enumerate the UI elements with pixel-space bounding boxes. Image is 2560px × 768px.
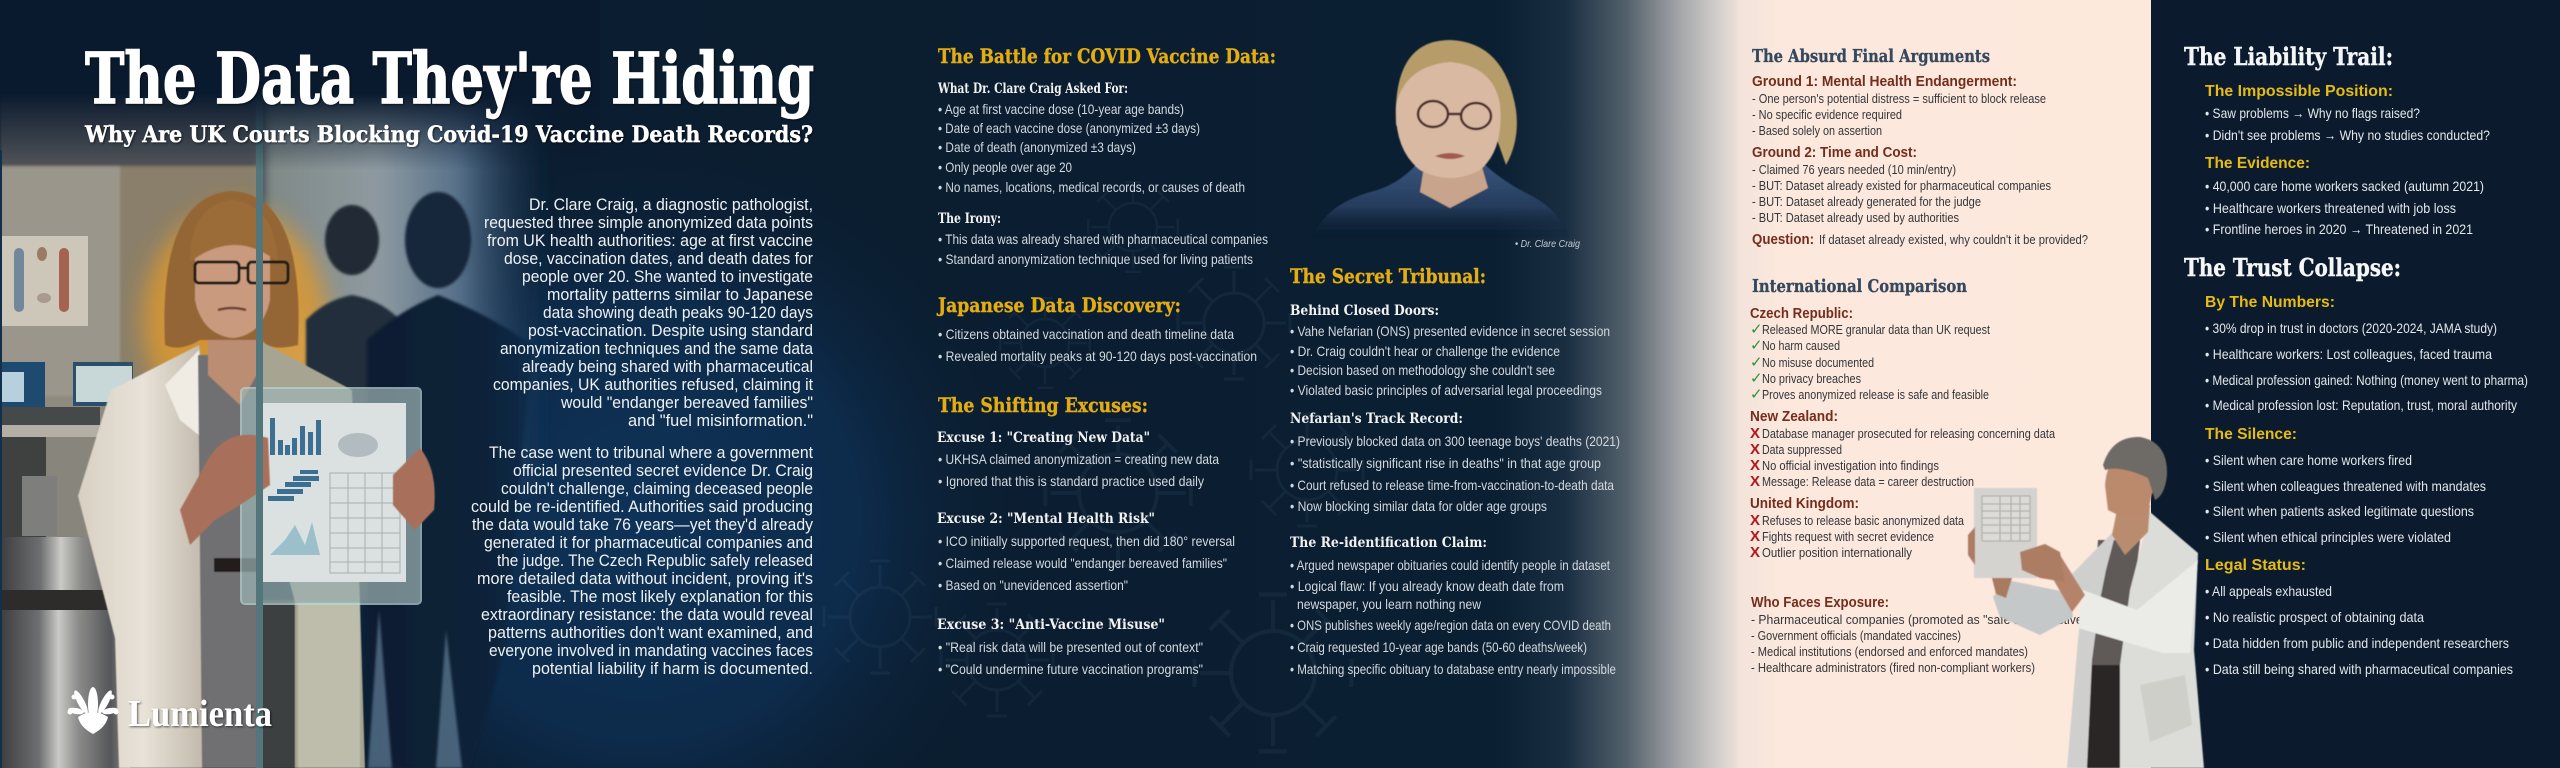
- section: The Battle for COVID Vaccine Data: • Standard anonymization technique used for living patients: [938, 251, 1253, 267]
- decorative virus pattern: [824, 182, 1363, 751]
- section: The Shifting Excuses: • ICO initially supported request, then did 180° reversal: [938, 533, 1235, 549]
- section: The Secret Tribunal: • Now blocking similar data for older age groups: [1290, 498, 1547, 514]
- text block: intro paragraph 1: people over 20. She wanted to investigate: [522, 268, 813, 286]
- text block: intro paragraph 2: could be re-identified. Authorities said producing: [471, 498, 813, 516]
- section: The Absurd Final Arguments: If dataset already existed, why couldn't it be provided?: [1819, 232, 2088, 247]
- section: The Trust Collapse: • Silent when care home workers fired: [2205, 452, 2412, 468]
- hands: [2020, 544, 2065, 582]
- section: The Trust Collapse: • Healthcare workers: Lost colleagues, faced trauma: [2205, 346, 2492, 362]
- section: The Trust Collapse: • All appeals exhausted: [2205, 583, 2332, 599]
- section: Japanese Data Discovery: Japanese Data Discovery:: [936, 293, 1181, 317]
- section: The Trust Collapse: By The Numbers:: [2205, 294, 2335, 311]
- section: The Shifting Excuses: • Based on "unevidenced assertion": [938, 577, 1128, 593]
- section: The Trust Collapse: • 30% drop in trust in doctors (2020-2024, JAMA study): [2205, 320, 2497, 336]
- section: The Battle for COVID Vaccine Data: • Date of each vaccine dose (anonymized ±3 days): [938, 120, 1200, 136]
- section: The Shifting Excuses: Excuse 3: "Anti-Vaccine Misuse": [937, 617, 1165, 633]
- section: The Battle for COVID Vaccine Data: The Battle for COVID Vaccine Data:: [938, 44, 1276, 68]
- lapel: [165, 350, 205, 440]
- New Zealand list: Database manager prosecuted for releasing concerning data: [1762, 426, 2056, 441]
- section: The Secret Tribunal: The Re-identification Claim:: [1290, 535, 1487, 551]
- coat sleeve right arm: [2078, 560, 2198, 653]
- Czech Republic list: Released MORE granular data than UK request: [1762, 322, 1990, 337]
- section: The Absurd Final Arguments: - Based solely on assertion: [1752, 123, 1882, 138]
- section: The Absurd Final Arguments: - Claimed 76 years needed (10 min/entry): [1752, 162, 1956, 177]
- section: The Trust Collapse: • Silent when patients asked legitimate questions: [2205, 503, 2474, 519]
- section: The Secret Tribunal: [1290, 264, 1620, 677]
- United Kingdom list: Outlier position internationally: [1762, 545, 1912, 560]
- section: The Shifting Excuses: • UKHSA claimed anonymization = creating new data: [938, 451, 1219, 467]
- section: The Absurd Final Arguments: - One person's potential distress = sufficient to block release: [1752, 91, 2046, 106]
- caption: • Dr. Clare Craig: [1515, 239, 1580, 250]
- section: The Liability Trail: • 40,000 care home workers sacked (autumn 2021): [2205, 178, 2484, 194]
- section: The Secret Tribunal: newspaper, you learn nothing new: [1297, 596, 1482, 612]
- text block: intro paragraph 1: from UK health authorities: age at first vaccine: [487, 232, 813, 250]
- section: The Absurd Final Arguments: The Absurd Final Arguments: [1752, 46, 1990, 67]
- section: The Battle for COVID Vaccine Data: • Date of death (anonymized ±3 days): [938, 139, 1136, 155]
- section: The Battle for COVID Vaccine Data: • Only people over age 20: [938, 159, 1072, 175]
- section: The Trust Collapse: • Data hidden from public and independent researchers: [2205, 635, 2509, 651]
- text block: intro paragraph 1: would "endanger bereaved families": [560, 394, 813, 412]
- neck: [2112, 505, 2150, 555]
- text block: intro paragraph 2: more detailed data without incident, proving it's: [477, 570, 813, 588]
- New Zealand list: X: [1750, 473, 1760, 490]
- text block: intro paragraph 2: The case went to tribunal where a government: [489, 444, 813, 462]
- text block: intro paragraph 2: generated it for pharmaceutical companies and: [484, 534, 813, 552]
- section: The Trust Collapse: The Silence:: [2205, 426, 2297, 443]
- shoulder glow: [270, 320, 370, 400]
- section: The Trust Collapse: [2184, 253, 2528, 677]
- United Kingdom list: United Kingdom:: [1750, 496, 1859, 512]
- section: The Battle for COVID Vaccine Data: • No names, locations, medical records, or causes of death: [938, 179, 1245, 195]
- neck: [208, 330, 262, 405]
- section: The Trust Collapse: • Medical profession lost: Reputation, trust, moral authority: [2205, 397, 2517, 413]
- Czech Republic list: ✓: [1750, 369, 1763, 387]
- text block: intro paragraph 1: data showing death peaks 90-120 days: [543, 304, 813, 322]
- forearms: [1992, 578, 2012, 598]
- room wall: [0, 90, 262, 430]
- section: The Battle for COVID Vaccine Data: What Dr. Clare Craig Asked For:: [937, 81, 1128, 97]
- face: [2105, 450, 2153, 519]
- shadow figure back: [306, 205, 398, 600]
- text block: intro paragraph 2: couldn't challenge, claiming deceased people: [501, 480, 813, 498]
- illustration: scientist behind glass with shadow figures: [0, 0, 600, 768]
- text block: intro paragraph 1: mortality patterns similar to Japanese: [547, 286, 813, 304]
- background: dark navy fading to peach: [0, 0, 1740, 768]
- United Kingdom list: Fights request with secret evidence: [1762, 529, 1934, 544]
- fringe: [190, 200, 278, 262]
- section: The Secret Tribunal: • ONS publishes weekly age/region data on every COVID death: [1290, 617, 1611, 633]
- line chart: [270, 522, 320, 555]
- sheet: [1974, 488, 2037, 578]
- lab coat left: [78, 345, 210, 768]
- section: The Trust Collapse: • No realistic prospect of obtaining data: [2205, 609, 2424, 625]
- section: The Secret Tribunal: Nefarian's Track Record:: [1290, 411, 1463, 427]
- text block: intro paragraph 1: requested three simple anonymized data points: [484, 214, 813, 232]
- monitors and counter: [0, 362, 133, 537]
- section: The Liability Trail: • Didn't see problems → Why no studies conducted?: [2205, 127, 2490, 143]
- title: The Data They're Hiding: [85, 37, 814, 120]
- text block: intro paragraph 1: and "fuel misinformation.": [628, 412, 813, 430]
- Czech Republic list: No harm caused: [1762, 338, 1840, 353]
- glasses: [1418, 101, 1491, 129]
- section: The Absurd Final Arguments: Ground 2: Time and Cost:: [1752, 145, 1917, 161]
- section: The Liability Trail: The Liability Trail:: [2184, 42, 2393, 71]
- shirt: [2090, 540, 2140, 665]
- neck: [1420, 160, 1488, 208]
- section: The Shifting Excuses: • Ignored that this is standard practice used daily: [938, 473, 1204, 489]
- panel: peach centre: [1738, 0, 2152, 768]
- United Kingdom list: Refuses to release basic anonymized data: [1762, 513, 1965, 528]
- New Zealand list: [1750, 409, 2056, 490]
- United Kingdom list: X: [1750, 528, 1760, 545]
- logo: Lumienta: [68, 687, 272, 735]
- section: The Battle for COVID Vaccine Data: The Irony:: [938, 211, 1001, 227]
- section: The Shifting Excuses: Excuse 2: "Mental Health Risk": [937, 511, 1155, 527]
- Czech Republic list: ✓: [1750, 353, 1763, 371]
- section: The Absurd Final Arguments: Ground 1: Mental Health Endangerment:: [1752, 74, 2017, 90]
- section: The Absurd Final Arguments: - BUT: Dataset already existed for pharmaceutical companies: [1752, 178, 2051, 193]
- section: The Secret Tribunal: • Craig requested 10-year age bands (50-60 deaths/week): [1290, 639, 1587, 655]
- trousers: [2086, 655, 2122, 768]
- face: [195, 238, 270, 338]
- steel tank: [0, 476, 135, 768]
- table: [330, 473, 400, 573]
- section: Japanese Data Discovery: • Revealed mortality peaks at 90-120 days post-vaccination: [938, 348, 1257, 364]
- Czech Republic list: No privacy breaches: [1762, 371, 1861, 386]
- mist spikes: [368, 610, 462, 768]
- scientist figure: [78, 191, 365, 768]
- section: The Shifting Excuses: Excuse 1: "Creating New Data": [937, 430, 1150, 446]
- left edge: [0, 150, 2, 768]
- sheet table: [1982, 496, 2030, 541]
- United Kingdom list: X: [1750, 512, 1760, 529]
- Czech Republic list: No misuse documented: [1762, 355, 1874, 370]
- section: The Trust Collapse: The Trust Collapse:: [2184, 253, 2401, 282]
- New Zealand list: No official investigation into findings: [1762, 458, 1939, 473]
- section: The Liability Trail: [2184, 42, 2490, 237]
- top fade: [0, 0, 600, 170]
- glasses: [195, 262, 288, 283]
- section: International Comparison: [1750, 276, 2056, 561]
- hair: [164, 191, 299, 348]
- section: The Secret Tribunal: • Vahe Nefarian (ONS) presented evidence in secret session: [1290, 323, 1610, 339]
- section: The Secret Tribunal: • "statistically significant rise in deaths" in that age group: [1290, 455, 1601, 471]
- section: The Absurd Final Arguments: - No specific evidence required: [1752, 107, 1902, 122]
- section: The Liability Trail: • Saw problems → Why no flags raised?: [2205, 105, 2420, 121]
- section: Who Faces Exposure: - Medical institutions (endorsed and enforced mandates): [1751, 644, 2028, 659]
- orange glow: [143, 208, 327, 432]
- text block: intro paragraph 2: everyone involved in mandating vaccines faces: [489, 642, 813, 660]
- Czech Republic list: Czech Republic:: [1750, 306, 1853, 322]
- text block: intro paragraph 1: [484, 196, 814, 430]
- text block: intro paragraph 2: potential liability if harm is documented.: [532, 660, 813, 678]
- text block: intro paragraph 2: [471, 444, 814, 678]
- section: Who Faces Exposure: - Pharmaceutical companies (promoted as "safe and effective"): [1751, 612, 2091, 627]
- section: The Secret Tribunal: • Matching specific obituary to database entry nearly impossible: [1290, 661, 1616, 677]
- section: The Liability Trail: • Frontline heroes in 2020 → Threatened in 2021: [2205, 221, 2473, 237]
- hair: [1396, 40, 1517, 165]
- section: The Liability Trail: • Healthcare workers threatened with job loss: [2205, 200, 2456, 216]
- wordmark: Lumienta: [128, 693, 272, 735]
- icon: Lumienta mark: [68, 687, 118, 734]
- Czech Republic list: ✓: [1750, 320, 1763, 338]
- text block: intro paragraph 2: patterns authorities don't want examined, and: [488, 624, 813, 642]
- text block: intro paragraph 1: post-vaccination. Despite using standard: [528, 322, 813, 340]
- section: The Secret Tribunal: • Dr. Craig couldn't hear or challenge the evidence: [1290, 343, 1560, 359]
- section: The Secret Tribunal: • Violated basic principles of adversarial legal proceedings: [1290, 382, 1602, 398]
- section: The Shifting Excuses: [937, 393, 1235, 677]
- section: Who Faces Exposure: - Government officials (mandated vaccines): [1751, 628, 1961, 643]
- paper: [260, 403, 406, 582]
- text block: intro paragraph 2: the data would take 76 years—yet they'd already: [472, 516, 814, 534]
- subtitle: Why Are UK Courts Blocking Covid-19 Vaccine Death Records?: [84, 122, 813, 148]
- text block: intro paragraph 1: dose, vaccination dates, and death dates for: [504, 250, 813, 268]
- hair: [2103, 437, 2167, 500]
- coat right front: [2120, 512, 2204, 768]
- section: The Trust Collapse: • Silent when colleagues threatened with mandates: [2205, 478, 2486, 494]
- lab coat right: [262, 342, 365, 768]
- text block: intro paragraph 1: already being shared with pharmaceutical: [522, 358, 813, 376]
- text block: intro paragraph 1: Dr. Clare Craig, a diagnostic pathologist,: [529, 196, 813, 214]
- section: Japanese Data Discovery: • Citizens obtained vaccination and death timeline data: [938, 326, 1234, 342]
- United Kingdom list: [1750, 496, 1965, 561]
- section: The Trust Collapse: • Silent when ethical principles were violated: [2205, 529, 2451, 545]
- shirt and trousers: [198, 355, 258, 768]
- illustration: doctor holding a sheet: [1968, 437, 2204, 768]
- text block: intro paragraph 2: official presented secret evidence Dr. Craig: [513, 462, 813, 480]
- section: The Shifting Excuses: The Shifting Excuses:: [938, 393, 1148, 417]
- New Zealand list: X: [1750, 441, 1760, 458]
- section: The Secret Tribunal: • Logical flaw: If you already know death date from: [1290, 578, 1564, 594]
- section: The Absurd Final Arguments: Question:: [1752, 232, 1814, 248]
- coat pocket: [2140, 675, 2192, 742]
- section: The Shifting Excuses: • "Could undermine future vaccination programs": [938, 661, 1203, 677]
- panel: dark right column: [2151, 0, 2560, 768]
- section: The Secret Tribunal: • Previously blocked data on 300 teenage boys' deaths (2021): [1290, 433, 1620, 449]
- gantt bars: [268, 470, 319, 501]
- text block: intro paragraph 1: companies, UK authorities refused, claiming it: [493, 376, 813, 394]
- section: International Comparison: International Comparison: [1752, 276, 1967, 297]
- Czech Republic list: Proves anonymized release is safe and feasible: [1762, 387, 1989, 402]
- mist on glass: [262, 90, 552, 490]
- shadow figure front: [367, 192, 532, 768]
- New Zealand list: New Zealand:: [1750, 409, 1838, 425]
- New Zealand list: X: [1750, 425, 1760, 442]
- Czech Republic list: ✓: [1750, 385, 1763, 403]
- mouth: [1435, 153, 1465, 159]
- photo: Dr. Clare Craig portrait: [1312, 40, 1569, 238]
- United Kingdom list: X: [1750, 544, 1760, 561]
- mouth: [218, 308, 246, 310]
- section: Japanese Data Discovery: [936, 293, 1257, 364]
- text block: intro paragraph 2: the judge. The Czech Republic safely released: [497, 552, 813, 570]
- section: Who Faces Exposure: Who Faces Exposure:: [1751, 595, 1889, 611]
- bar chart: [270, 418, 321, 455]
- section: The Secret Tribunal: The Secret Tribunal:: [1290, 264, 1486, 288]
- hands: [180, 435, 435, 545]
- section: The Liability Trail: The Evidence:: [2205, 155, 2310, 172]
- New Zealand list: Message: Release data = career destruction: [1762, 474, 1974, 489]
- section: The Battle for COVID Vaccine Data: • This data was already shared with pharmaceutical companies: [938, 231, 1268, 247]
- section: The Absurd Final Arguments: [1752, 46, 2088, 248]
- anatomy poster: [2, 236, 88, 326]
- section: The Secret Tribunal: Behind Closed Doors:: [1290, 303, 1439, 319]
- section: The Trust Collapse: Legal Status:: [2205, 557, 2306, 574]
- text block: intro paragraph 2: extraordinary resistance: the data would reveal: [481, 606, 813, 624]
- glass data panel: [241, 388, 421, 604]
- section: The Secret Tribunal: • Argued newspaper obituaries could identify people in dataset: [1290, 557, 1610, 573]
- section: The Liability Trail: The Impossible Position:: [2205, 83, 2393, 100]
- background glow behind intro text: [200, 100, 1060, 768]
- section: The Absurd Final Arguments: - BUT: Dataset already used by authorities: [1752, 210, 1959, 225]
- Czech Republic list: ✓: [1750, 336, 1763, 354]
- section: Who Faces Exposure: [1751, 595, 2091, 675]
- New Zealand list: X: [1750, 457, 1760, 474]
- Czech Republic list: [1750, 306, 1990, 403]
- section: The Shifting Excuses: • "Real risk data will be presented out of context": [938, 639, 1203, 655]
- section: The Battle for COVID Vaccine Data: [937, 44, 1276, 267]
- section: The Secret Tribunal: • Decision based on methodology she couldn't see: [1290, 362, 1555, 378]
- face: [1396, 62, 1501, 178]
- section: The Shifting Excuses: • Claimed release would "endanger bereaved families": [938, 555, 1227, 571]
- section: The Secret Tribunal: • Court refused to release time-from-vaccination-to-death data: [1290, 477, 1614, 493]
- shoulders: [1312, 160, 1569, 238]
- coat left front: [2067, 528, 2117, 768]
- New Zealand list: Data suppressed: [1762, 442, 1842, 457]
- section: The Trust Collapse: • Data still being shared with pharmaceutical companies: [2205, 661, 2513, 677]
- section: The Battle for COVID Vaccine Data: • Age at first vaccine dose (10-year age bands): [938, 101, 1184, 117]
- section: The Absurd Final Arguments: - BUT: Dataset already generated for the judge: [1752, 194, 1981, 209]
- scatter: [338, 433, 378, 457]
- glass edge: [256, 40, 263, 768]
- text block: intro paragraph 2: feasible. The most likely explanation for this: [507, 588, 813, 606]
- coat sleeve left arm: [1993, 580, 2073, 635]
- section: Who Faces Exposure: - Healthcare administrators (fired non-compliant workers): [1751, 660, 2035, 675]
- text block: intro paragraph 1: anonymization techniques and the same data: [500, 340, 814, 358]
